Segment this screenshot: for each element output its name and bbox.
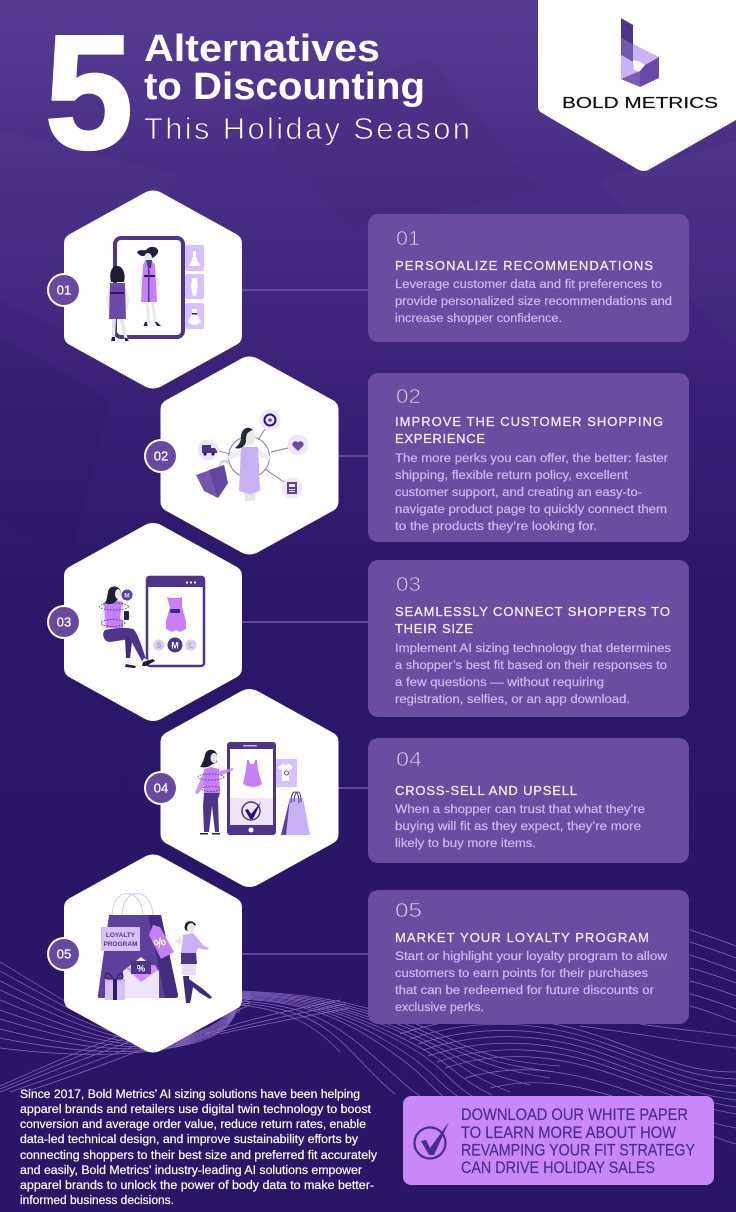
panel: card 05 loyalty program: customers to earn points for their purchases — [395, 966, 648, 980]
step number badge 02 — [144, 439, 178, 473]
illustration: loyalty shopping bag: PROGRAM — [104, 941, 137, 948]
connector lines — [241, 290, 368, 954]
step number badge 01: 01 — [57, 282, 71, 298]
illustration: shopper sitting by phone — [100, 576, 205, 668]
icon: Bold Metrics mark — [621, 18, 659, 87]
panel: card 04 cross-sell and upsell: likely to buy more items. — [395, 836, 536, 850]
panel: card 02 customer shopping experience: customer support, and creating an easy-to- — [395, 485, 642, 499]
callout text: REVAMPING YOUR FIT STRATEGY — [461, 1142, 695, 1160]
step number badge 01 — [47, 273, 81, 307]
panel: card 04 cross-sell and upsell: CROSS-SELL AND UPSELL — [395, 783, 577, 798]
heading: Alternatives — [144, 28, 380, 70]
decorative wave lines — [0, 930, 736, 1144]
panel: card 01 personalize recommendations: PERSONALIZE RECOMMENDATIONS — [395, 258, 653, 273]
illustration: shopper at phone with bag — [195, 742, 310, 835]
panel: card 05 loyalty program: MARKET YOUR LOYALTY PROGRAM — [395, 930, 649, 945]
panel: card 04 cross-sell and upsell: buying will fit as they expect, they’re more — [395, 819, 641, 833]
panel: card 01 personalize recommendations — [368, 214, 689, 342]
logo wordmark: BOLD METRICS — [562, 95, 718, 112]
text block: company description: data-led technical design, and improve sustainability efforts by — [20, 1132, 359, 1146]
illustration: loyalty shopping bag: % — [151, 933, 169, 952]
subheading: This Holiday Season — [144, 111, 470, 146]
panel: card 03 connect shoppers to size: THEIR SIZE — [395, 621, 473, 636]
panel: card 02 customer shopping experience: navigate product page to quickly connect them — [395, 502, 667, 516]
callout: download white paper — [403, 1096, 714, 1185]
text block: company description — [20, 1087, 378, 1207]
illustration: loyalty shopping bag: % — [137, 964, 146, 974]
panel: card 04 cross-sell and upsell — [368, 738, 689, 863]
panel: card 02 customer shopping experience: IMPROVE THE CUSTOMER SHOPPING — [395, 414, 663, 429]
panel: card 01 personalize recommendations: increase shopper confidence. — [395, 311, 562, 325]
callout text: CAN DRIVE HOLIDAY SALES — [461, 1159, 655, 1177]
panel: card 04 cross-sell and upsell: When a shopper can trust that what they’re — [395, 802, 645, 816]
text block: company description: and easily, Bold Metrics' industry-leading AI solutions empower — [20, 1163, 362, 1177]
step number badge 05 — [47, 937, 81, 971]
panel: card 03 connect shoppers to size: Implement AI sizing technology that determines — [395, 641, 671, 655]
panel: step 5 hexagon — [64, 854, 242, 1052]
step number badge 02: 02 — [154, 448, 168, 464]
illustration: shopper sitting by phone: M — [171, 640, 179, 650]
illustration: woman with service icons — [196, 410, 308, 501]
panel: card 05 loyalty program: 05 — [395, 900, 422, 922]
panel: card 02 customer shopping experience: shipping, flexible return policy, excellent — [395, 468, 629, 482]
heading: to Discounting — [144, 66, 425, 108]
panel: card 03 connect shoppers to size: SEAMLESSLY CONNECT SHOPPERS TO — [395, 604, 670, 619]
panel: card 05 loyalty program: that can be redeemed for future discounts or — [395, 983, 654, 997]
heading — [144, 28, 425, 108]
title: big number 5: 5 — [45, 2, 133, 183]
panel: card 01 personalize recommendations: Leverage customer data and fit preferences to — [395, 277, 662, 291]
illustration: loyalty shopping bag: LOYALTY — [106, 932, 136, 939]
panel: card 02 customer shopping experience: The more perks you can offer, the better: faster — [395, 451, 668, 465]
illustration: loyalty shopping bag — [98, 894, 212, 1003]
callout text: DOWNLOAD OUR WHITE PAPER — [461, 1106, 688, 1124]
step number badge 05: 05 — [57, 946, 71, 962]
step number badge 04: 04 — [154, 780, 168, 796]
step number badge 03 — [47, 605, 81, 639]
panel: card 03 connect shoppers to size: a few questions — without requiring — [395, 675, 604, 689]
logo badge — [538, 0, 736, 171]
icon: check mark — [414, 1122, 449, 1158]
panel: card 04 cross-sell and upsell: 04 — [396, 749, 422, 771]
text block: company description: apparel brands and retailers use digital twin technology to boost — [20, 1102, 372, 1116]
step number badge 03: 03 — [57, 614, 71, 630]
panel: card 03 connect shoppers to size: a shopper’s best fit based on their responses to — [395, 658, 667, 672]
panel: card 02 customer shopping experience — [368, 373, 689, 542]
panel: card 02 customer shopping experience: to the products they’re looking for. — [395, 519, 597, 533]
panel: step 2 hexagon — [160, 356, 338, 554]
text block: company description: informed business decisions. — [20, 1193, 174, 1207]
panel: card 05 loyalty program: Start or highlight your loyalty program to allow — [395, 949, 667, 963]
text block: company description: connecting shoppers to their best size and preferred fit accurately — [20, 1148, 378, 1162]
panel: card 02 customer shopping experience: EXPERIENCE — [395, 431, 485, 446]
illustration: shopper sitting by phone: S — [157, 642, 162, 650]
illustration: shopper sitting by phone: M — [124, 592, 130, 600]
panel: step 4 hexagon — [160, 689, 338, 887]
step number badge 04 — [144, 771, 178, 805]
panel: card 01 personalize recommendations: 01 — [396, 228, 420, 250]
panel: step 1 hexagon — [64, 190, 242, 388]
text block: company description: apparel brands to unlock the power of body data to make better- — [20, 1178, 374, 1192]
panel: card 03 connect shoppers to size: 03 — [396, 574, 421, 596]
panel: step 3 hexagon — [64, 523, 242, 721]
callout text — [461, 1106, 695, 1177]
illustration: shopper sitting by phone: L — [189, 642, 193, 650]
panel: card 03 connect shoppers to size: registration, selfies, or an app download. — [395, 692, 630, 706]
panel: card 05 loyalty program — [368, 890, 689, 1024]
text block: company description: conversion and average order value, reduce return rates, enable — [20, 1117, 366, 1131]
illustration: mirror with dresses — [105, 238, 204, 341]
panel: card 02 customer shopping experience: 02 — [396, 386, 421, 408]
panel: card 05 loyalty program: exclusive perks. — [395, 1000, 484, 1014]
panel: card 03 connect shoppers to size — [368, 560, 689, 717]
text block: company description: Since 2017, Bold Metrics’ AI sizing solutions have been helping — [20, 1087, 360, 1101]
callout text: TO LEARN MORE ABOUT HOW — [461, 1124, 677, 1142]
panel: card 01 personalize recommendations: provide personalized size recommendations and — [395, 294, 672, 308]
